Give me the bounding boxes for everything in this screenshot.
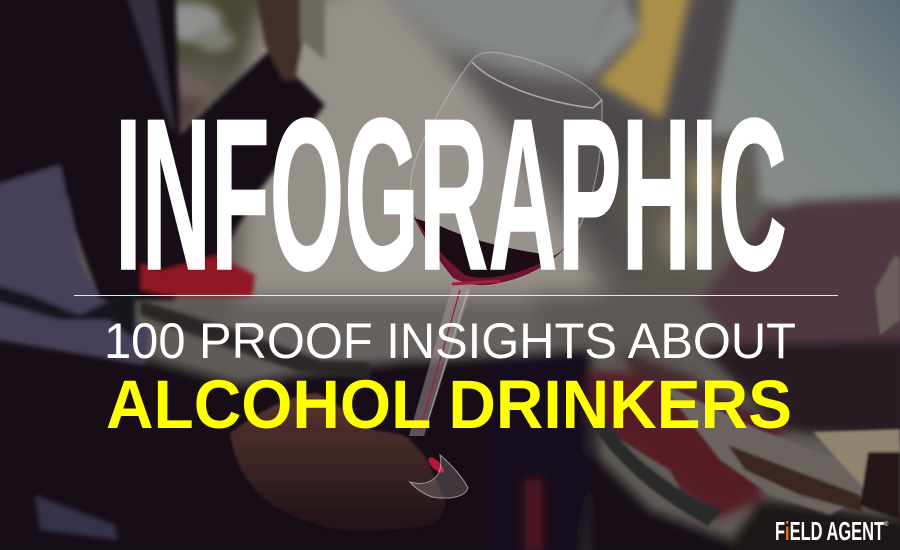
glass rim — [472, 62, 602, 108]
red fingernail — [426, 455, 446, 475]
logo registered mark: ® — [884, 521, 889, 528]
wine — [414, 218, 556, 285]
glass foot — [410, 455, 468, 498]
wine glass — [409, 52, 602, 498]
divider line — [74, 295, 838, 296]
highlighted heading: alcohol drinkers: ALCOHOL DRINKERS — [106, 366, 792, 443]
glass stem — [409, 286, 472, 436]
seated figure with dark hair and jacket — [0, 0, 325, 365]
subtitle: 100 proof insights about: 100 PROOF INSIGHTS ABOUT — [104, 313, 796, 369]
hand holding the glass base — [230, 393, 445, 531]
table plate at right — [585, 255, 900, 526]
